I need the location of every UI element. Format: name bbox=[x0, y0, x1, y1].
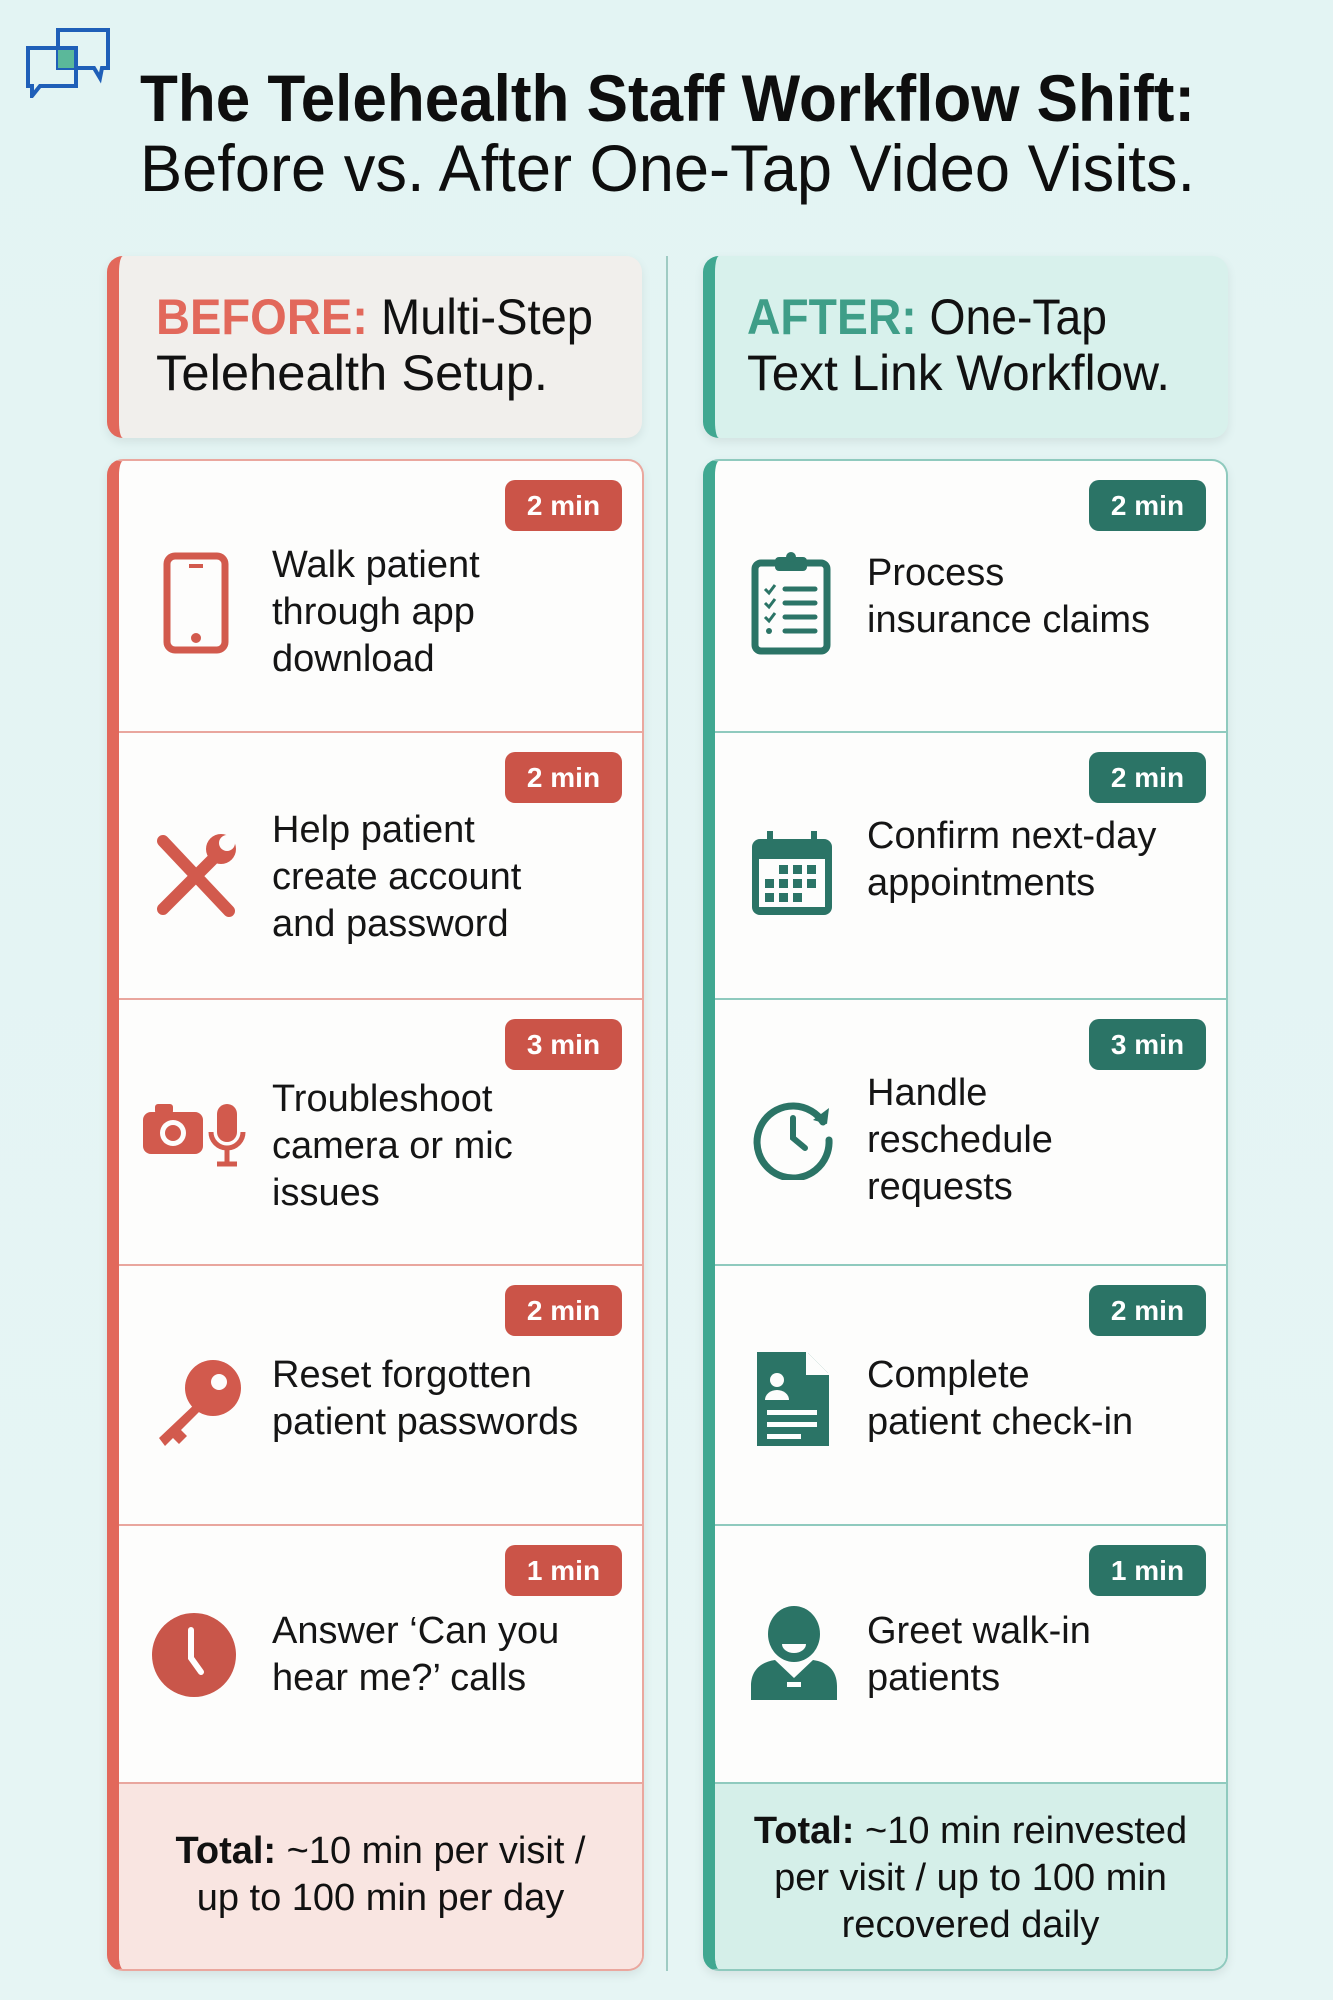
row: account bbox=[119, 733, 642, 1000]
row: camera mic bbox=[119, 1000, 642, 1266]
row: calls bbox=[119, 1526, 642, 1784]
row: camera mic: Troubleshoot bbox=[272, 1078, 492, 1120]
title bbox=[140, 61, 1195, 205]
row: check-in: 2 min bbox=[1111, 1295, 1184, 1326]
row: camera mic: issues bbox=[272, 1172, 380, 1214]
row: greet: 1 min bbox=[1111, 1555, 1184, 1586]
header: after bbox=[703, 256, 1228, 438]
row: camera mic: camera or mic bbox=[272, 1125, 513, 1167]
row: insurance: insurance claims bbox=[867, 599, 1150, 641]
panel: after steps bbox=[703, 459, 1228, 1971]
row: app download: download bbox=[272, 638, 435, 680]
title: Before vs. After One-Tap Video Visits. bbox=[140, 131, 1195, 205]
header: before: Telehealth Setup. bbox=[156, 345, 548, 401]
total: after: recovered daily bbox=[842, 1904, 1099, 1946]
panel: before steps bbox=[107, 459, 644, 1971]
row: camera mic: 3 min bbox=[527, 1029, 600, 1060]
row: account: Help patient bbox=[272, 809, 475, 851]
header: after: AFTER: One-Tap bbox=[747, 289, 1107, 345]
row: reschedule: Handle bbox=[867, 1072, 987, 1114]
total: after: Total: ~10 min reinvested bbox=[754, 1810, 1187, 1852]
row: appointments bbox=[715, 733, 1226, 1000]
row: check-in: Complete bbox=[867, 1354, 1030, 1396]
row: app download: 2 min bbox=[527, 490, 600, 521]
row: calls: Answer ‘Can you bbox=[272, 1610, 559, 1652]
row: calls: hear me?’ calls bbox=[272, 1657, 526, 1699]
divider bbox=[666, 256, 668, 1971]
total: before bbox=[119, 1784, 642, 1969]
title: The Telehealth Staff Workflow Shift: bbox=[140, 61, 1195, 135]
row: greet: Greet walk-in bbox=[867, 1610, 1091, 1652]
row: check-in: patient check-in bbox=[867, 1401, 1133, 1443]
row: reschedule: reschedule bbox=[867, 1119, 1053, 1161]
header: after: Text Link Workflow. bbox=[747, 345, 1170, 401]
row: reschedule: 3 min bbox=[1111, 1029, 1184, 1060]
row: appointments: appointments bbox=[867, 862, 1095, 904]
header: before: BEFORE: Multi-Step bbox=[156, 289, 593, 345]
row: reschedule bbox=[715, 1000, 1226, 1266]
total: after: per visit / up to 100 min bbox=[774, 1857, 1167, 1899]
header: before bbox=[107, 256, 642, 438]
row: insurance: Process bbox=[867, 552, 1004, 594]
row: passwords: patient passwords bbox=[272, 1401, 578, 1443]
logo icon: chat bubbles bbox=[26, 28, 110, 98]
row: passwords: Reset forgotten bbox=[272, 1354, 532, 1396]
row: insurance: 2 min bbox=[1111, 490, 1184, 521]
row: app download bbox=[119, 461, 642, 733]
row: calls: 1 min bbox=[527, 1555, 600, 1586]
row: app download: through app bbox=[272, 591, 475, 633]
row: greet: patients bbox=[867, 1657, 1000, 1699]
total: before: up to 100 min per day bbox=[197, 1877, 564, 1919]
row: reschedule: requests bbox=[867, 1166, 1013, 1208]
row: app download: Walk patient bbox=[272, 544, 480, 586]
row: appointments: Confirm next-day bbox=[867, 815, 1156, 857]
row: passwords: 2 min bbox=[527, 1295, 600, 1326]
total: after bbox=[715, 1784, 1226, 1969]
row: check-in bbox=[715, 1266, 1226, 1526]
row: insurance bbox=[715, 461, 1226, 733]
row: account: 2 min bbox=[527, 762, 600, 793]
row: account: create account bbox=[272, 856, 521, 898]
row: passwords bbox=[119, 1266, 642, 1526]
row: account: and password bbox=[272, 903, 509, 945]
total: before: Total: ~10 min per visit / bbox=[175, 1830, 586, 1872]
row: greet bbox=[715, 1526, 1226, 1784]
row: appointments: 2 min bbox=[1111, 762, 1184, 793]
